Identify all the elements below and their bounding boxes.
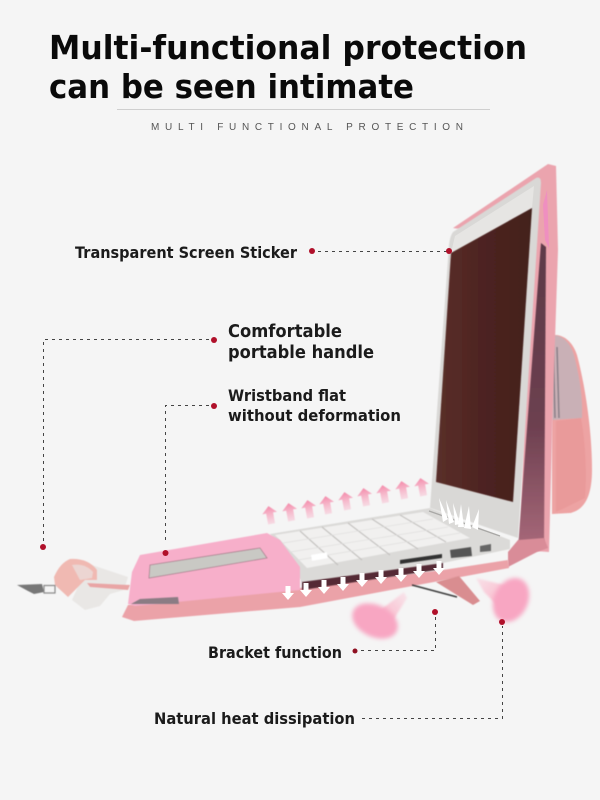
pink strip xyxy=(87,583,130,590)
pink loop xyxy=(54,559,97,597)
carry handle xyxy=(17,559,130,610)
vent spikes xyxy=(439,498,479,530)
left pink airflow puff xyxy=(346,592,407,646)
title xyxy=(49,28,527,106)
callout: wristband flat: Wristband flat xyxy=(228,386,346,405)
laptop ports xyxy=(400,544,491,564)
side pocket xyxy=(552,335,592,514)
callout: transparent screen sticker xyxy=(75,243,452,262)
callout: comfortable portable handle: portable handle xyxy=(228,342,374,363)
laptop sleeve illustration xyxy=(17,164,592,646)
title: Multi-functional protection xyxy=(49,28,527,67)
sleeve inner shadow xyxy=(518,243,546,548)
up heat arrows xyxy=(261,477,431,525)
flap window xyxy=(149,548,267,578)
header rule xyxy=(117,109,490,110)
sleeve back panel xyxy=(453,164,558,552)
laptop base xyxy=(270,508,510,582)
callout: natural heat dissipation xyxy=(154,619,505,728)
subtitle: MULTI FUNCTIONAL PROTECTION xyxy=(151,122,463,133)
callout: comfortable portable handle xyxy=(40,321,374,550)
down airflow arrows xyxy=(282,561,445,600)
vent slots xyxy=(302,561,443,590)
callout: transparent screen sticker: Transparent Screen Sticker xyxy=(75,243,297,262)
title: can be seen intimate xyxy=(49,67,414,106)
callout: wristband flat: without deformation xyxy=(228,406,401,425)
callout: natural heat dissipation: Natural heat dissipation xyxy=(154,709,355,728)
laptop lid xyxy=(430,178,541,538)
case floor xyxy=(122,560,509,621)
callout: bracket function xyxy=(208,609,438,662)
sleeve hinge corner xyxy=(508,538,548,567)
callout: bracket function: Bracket function xyxy=(208,643,342,662)
keyboard xyxy=(275,512,470,568)
pink wrist flap xyxy=(128,533,300,606)
metal clip xyxy=(17,584,44,594)
callout: wristband flat xyxy=(162,386,401,556)
right pink airflow puff xyxy=(476,572,536,628)
stand bracket xyxy=(412,576,480,605)
flap chrome edge xyxy=(131,597,179,604)
screen xyxy=(436,208,532,502)
callout: comfortable portable handle: Comfortable xyxy=(228,321,342,342)
white strap xyxy=(72,565,128,610)
